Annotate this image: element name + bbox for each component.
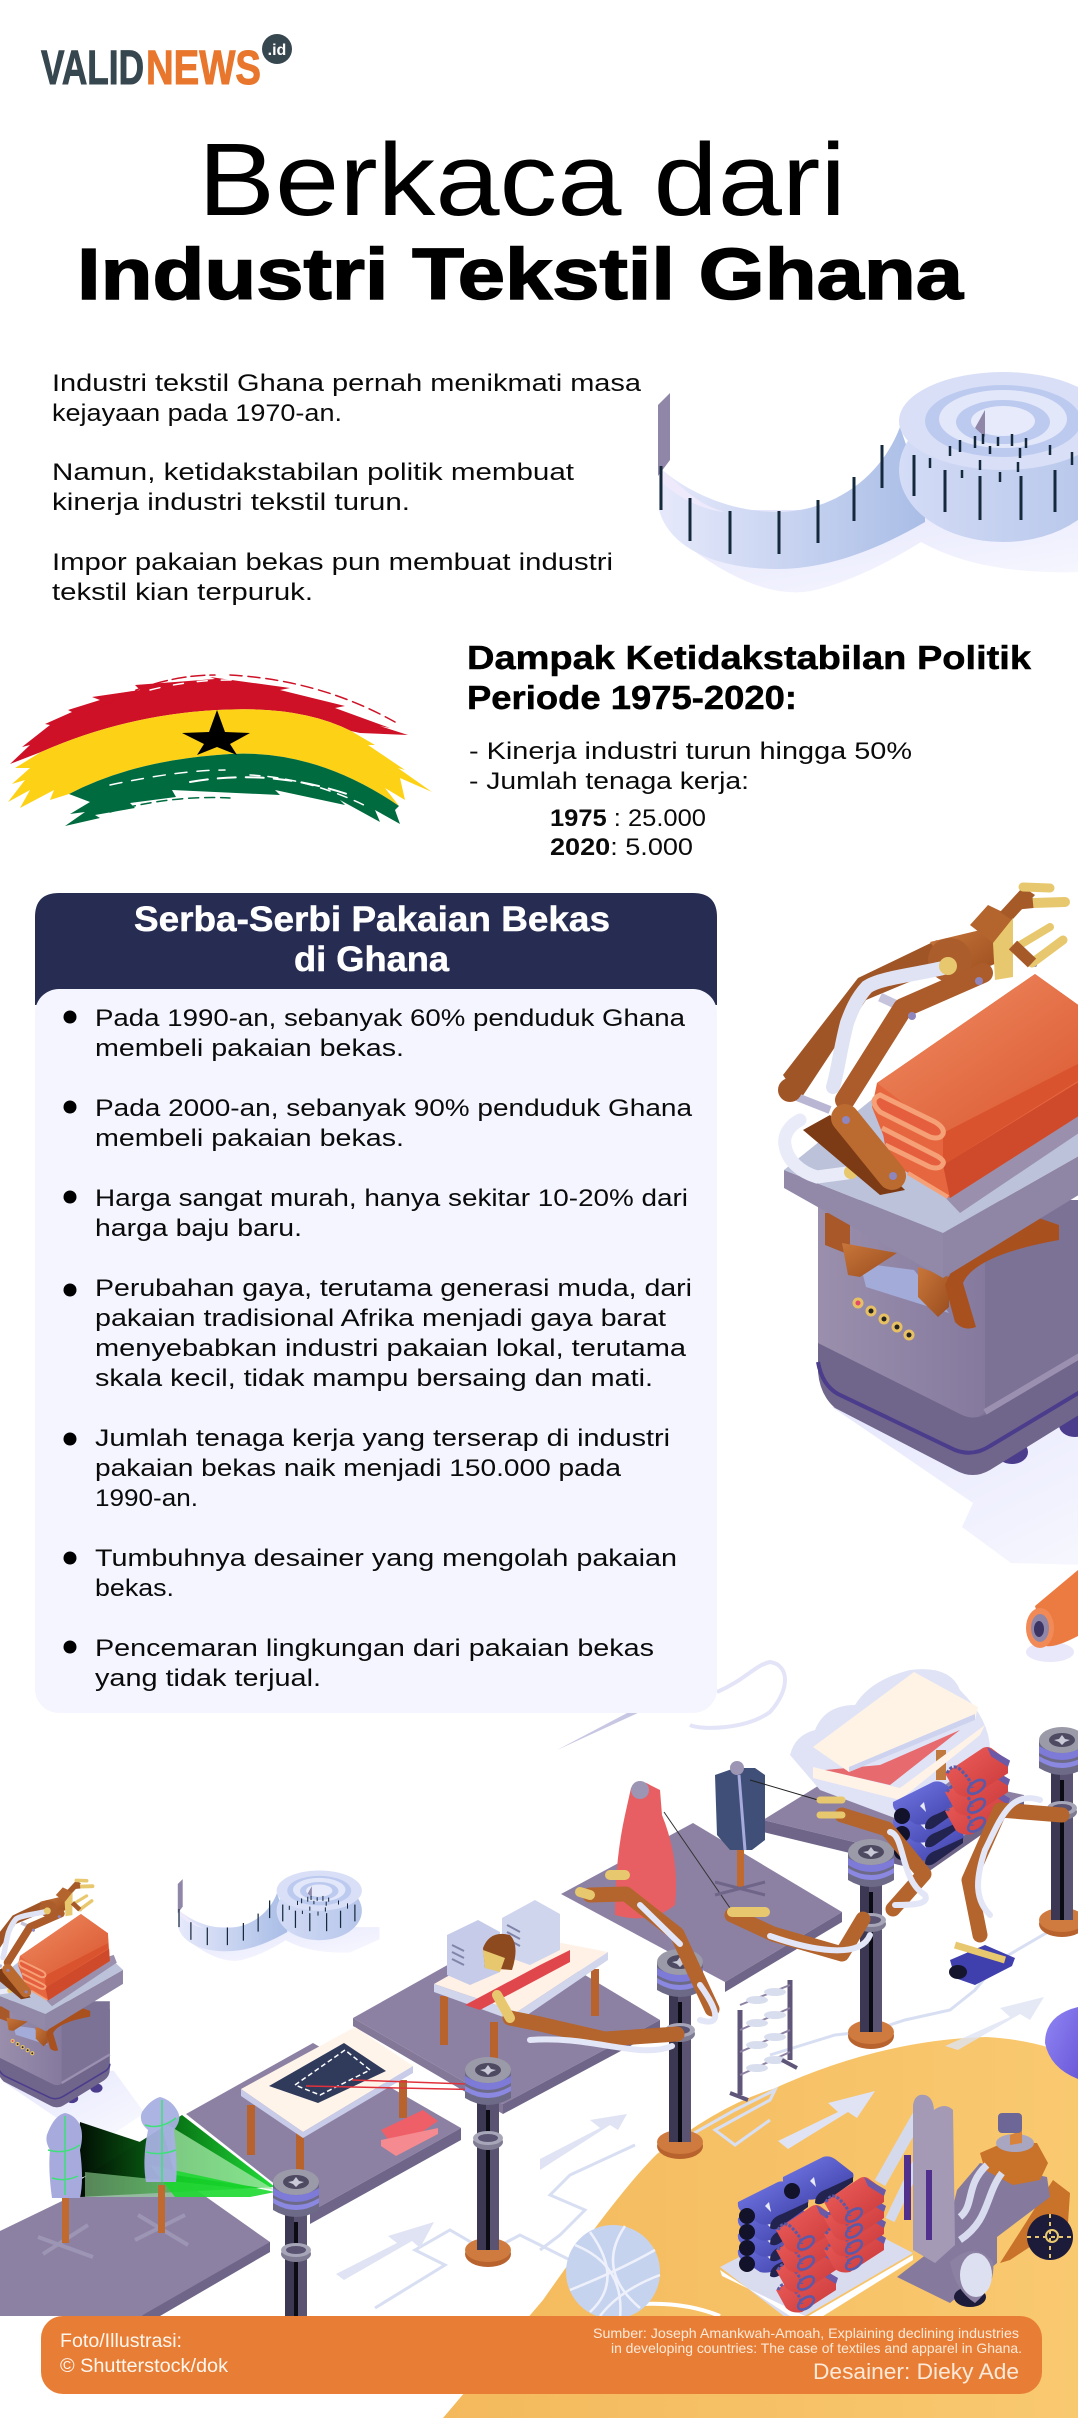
bullet: designers: bekas. <box>95 1575 174 1602</box>
bullet: pollution: yang tidak terjual. <box>95 1665 321 1692</box>
folded red cloth <box>381 2110 438 2156</box>
impact list: - Kinerja industri turun hingga 50% <box>469 738 912 765</box>
intro text: Namun, ketidakstabilan politik membuat <box>52 459 574 486</box>
platform: fourth <box>561 1823 842 1992</box>
intro text: Industri tekstil Ghana pernah menikmati masa <box>52 370 642 397</box>
bullet: workforce <box>64 1425 670 1512</box>
illustration: measuring tape <box>658 372 1078 592</box>
intro text: Impor pakaian bekas pun membuat industri <box>52 549 613 576</box>
stacked red clothes rear <box>824 2177 886 2272</box>
bullet: workforce: 1990-an. <box>95 1485 198 1512</box>
intro text <box>52 370 642 606</box>
pillar 4 <box>848 1839 894 2049</box>
platform: left <box>0 2158 270 2316</box>
clothes pallet <box>720 2210 913 2318</box>
intro text: kinerja industri tekstil turun. <box>52 489 410 516</box>
press machine <box>790 1669 990 1820</box>
robot arm: pillar 4 left <box>732 1912 870 1954</box>
ground: sand area <box>443 2037 1078 2418</box>
source and designer: in developing countries: The case of textiles and apparel in Ghana. <box>611 2340 1022 2356</box>
bullet: workforce: pakaian bekas naik menjadi 150.000 pada <box>95 1455 622 1482</box>
photo credit <box>60 2331 229 2377</box>
bullet: 60 percent: membeli pakaian bekas. <box>95 1035 404 1062</box>
bullet: style change: Perubahan gaya, terutama generasi muda, dari <box>95 1275 692 1302</box>
platform: fifth <box>763 1760 1024 1872</box>
impact list: 2020 : 5.000 <box>550 834 693 861</box>
bullet: price <box>64 1185 688 1242</box>
photo credit: Foto/Illustrasi: <box>60 2331 182 2352</box>
illustration: robot arm with folded cloth <box>778 887 1078 1565</box>
bullet: designers: Tumbuhnya desainer yang mengolah pakaian <box>95 1545 677 1572</box>
logo: .id <box>268 42 286 59</box>
pillar 3 <box>657 1949 703 2159</box>
infographic card <box>35 893 717 1713</box>
stacked red clothes front <box>776 2205 838 2312</box>
platform: second <box>186 2043 461 2224</box>
bullet: price: Harga sangat murah, hanya sekitar 10-20% dari <box>95 1185 688 1212</box>
bullet: designers <box>64 1545 677 1602</box>
source and designer: Desainer: Dieky Ade <box>813 2359 1019 2384</box>
title: Berkaca dari <box>198 122 846 237</box>
logo: NEWS <box>146 42 261 95</box>
source and designer <box>593 2325 1022 2384</box>
forklift robot <box>880 2095 1073 2307</box>
icon: purple blob <box>1045 2007 1078 2079</box>
impact list: 1975 : 25.000 <box>550 805 706 832</box>
yarn rack <box>730 1980 797 2100</box>
green scan beams <box>75 2115 275 2197</box>
footer bar <box>41 2316 1042 2394</box>
heading: impact: Dampak Ketidakstabilan Politik <box>467 639 1032 676</box>
card header <box>35 893 717 1005</box>
platform: third <box>353 1930 660 2114</box>
bullet: 60 percent <box>64 1005 686 1062</box>
stacked blue clothes on pallet <box>738 2181 808 2277</box>
bullet: 60 percent: Pada 1990-an, sebanyak 60% penduduk Ghana <box>95 1005 686 1032</box>
bullet: style change: skala kecil, tidak mampu bersaing dan mati. <box>95 1365 653 1392</box>
pillar 5 <box>1039 1727 1078 1937</box>
circuit lines <box>375 1925 1060 2308</box>
title: Industri Tekstil Ghana <box>77 235 964 315</box>
mannequin 2 <box>135 2097 188 2245</box>
bullet: style change <box>64 1275 692 1392</box>
bullet: style change: menyebabkan industri pakaian lokal, terutama <box>95 1335 687 1362</box>
heading: impact <box>467 639 1032 716</box>
robot arm: pillar 4 right <box>820 1800 926 1909</box>
pillar 2 <box>465 2057 511 2267</box>
bullet: pollution <box>64 1635 654 1692</box>
robot arm: pillar 5 <box>969 1798 1062 1935</box>
jacket mannequin <box>715 1761 818 1895</box>
decor: thread and needle <box>557 1662 785 1750</box>
icon: fabric roll <box>1026 1570 1078 1662</box>
bullet: pollution: Pencemaran lingkungan dari pakaian bekas <box>95 1635 654 1662</box>
bullet: 90 percent: membeli pakaian bekas. <box>95 1125 404 1152</box>
card body <box>35 989 717 1713</box>
arrows <box>336 1997 1044 2280</box>
title <box>77 122 964 315</box>
sewing table with machines <box>434 1900 608 2060</box>
source and designer: Sumber: Joseph Amankwah-Amoah, Explaining declining industries <box>593 2325 1019 2341</box>
bullet: 90 percent <box>64 1095 693 1152</box>
robot claw carrying blue clothes <box>949 1945 1015 1985</box>
illustration: small tape measure <box>178 1871 380 1961</box>
red dress mannequin <box>615 1781 730 1918</box>
yarn ball <box>566 2225 720 2319</box>
stacked blue clothes <box>893 1781 964 1865</box>
photo credit: © Shutterstock/dok <box>60 2356 229 2377</box>
logo <box>41 34 292 95</box>
cutting table with pattern <box>241 2027 495 2172</box>
intro text: tekstil kian terpuruk. <box>52 579 313 606</box>
bullet: price: harga baju baru. <box>95 1215 302 1242</box>
icon: Ghana flag brush <box>8 675 432 826</box>
bullet: 90 percent: Pada 2000-an, sebanyak 90% penduduk Ghana <box>95 1095 693 1122</box>
heading: impact: Periode 1975-2020: <box>467 679 797 716</box>
card header: Serba-Serbi Pakaian Bekas <box>134 900 610 939</box>
impact list <box>469 738 912 861</box>
pillar 1 <box>273 2169 319 2379</box>
robot arm: pillar 3 left <box>497 1995 677 2050</box>
intro text: kejayaan pada 1970-an. <box>52 400 342 427</box>
bullet: workforce: Jumlah tenaga kerja yang terserap di industri <box>95 1425 670 1452</box>
robot arm: pillar 3 upper <box>580 1875 715 2022</box>
mannequin 1 <box>38 2113 93 2257</box>
stacked blue clothes rear <box>783 2156 854 2204</box>
illustration: small robot <box>0 1880 145 2142</box>
stacked red clothes <box>945 1747 1010 1835</box>
logo: VALID <box>41 42 144 95</box>
card header: di Ghana <box>294 940 450 979</box>
bullet: style change: pakaian tradisional Afrika menjadi gaya barat <box>95 1305 666 1332</box>
impact list: - Jumlah tenaga kerja: <box>469 768 749 795</box>
